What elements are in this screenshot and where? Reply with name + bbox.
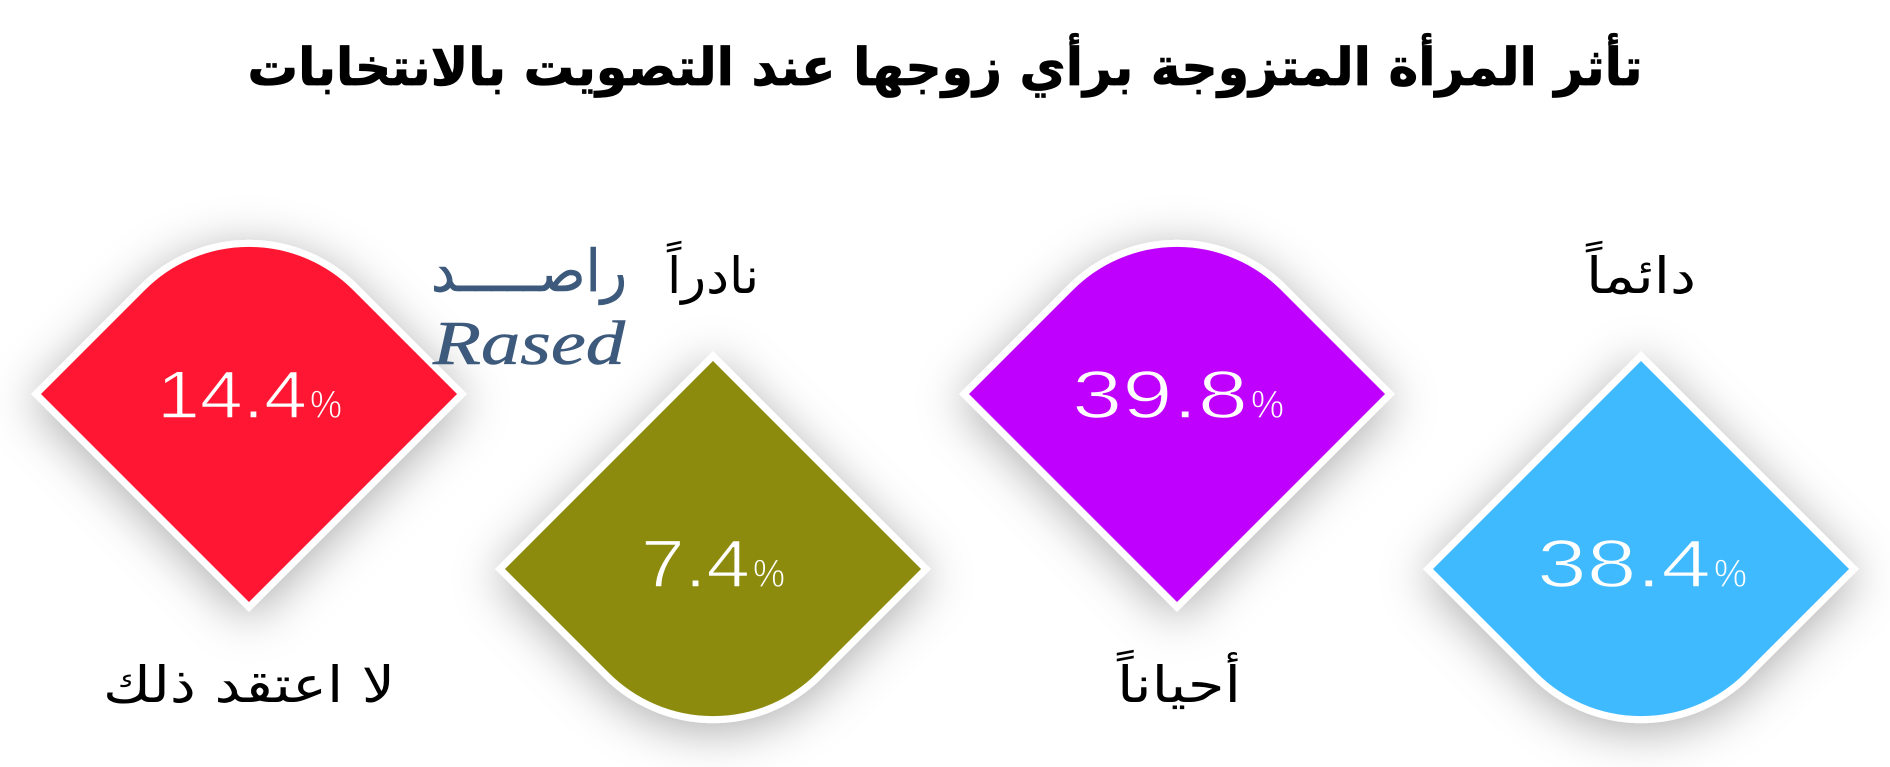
panel: purple diamond 39.8%: % — [1251, 384, 1284, 427]
logo: Rased: Rased — [432, 310, 626, 378]
panel: red diamond 14.4%: 14.4 — [157, 357, 307, 433]
logo: Rased: راصـــــد — [431, 237, 627, 305]
panel: olive diamond 7.4%: 7.4 — [641, 526, 750, 602]
panel: olive diamond 7.4%: % — [753, 553, 785, 596]
title: تأثر المرأة المتزوجة برأي زوجها عند التصويت بالانتخابات — [248, 33, 1642, 98]
label: sometimes: أحياناً — [1116, 649, 1241, 714]
panel: blue diamond 38.4%: % — [1714, 553, 1747, 596]
label: always: دائماً — [1585, 240, 1696, 305]
panel: blue diamond 38.4%: 38.4 — [1537, 526, 1711, 602]
label: rarely: نادراً — [666, 240, 759, 305]
panel: red diamond 14.4%: % — [310, 384, 342, 427]
logo: Rased — [431, 237, 627, 378]
label: I don't think so: لا اعتقد ذلك — [103, 656, 395, 714]
panel: red diamond 14.4% — [36, 243, 462, 607]
panel: olive diamond 7.4% — [500, 356, 926, 720]
panel: purple diamond 39.8%: 39.8 — [1072, 357, 1248, 433]
panel: blue diamond 38.4% — [1428, 356, 1854, 720]
panel: purple diamond 39.8% — [964, 243, 1390, 607]
